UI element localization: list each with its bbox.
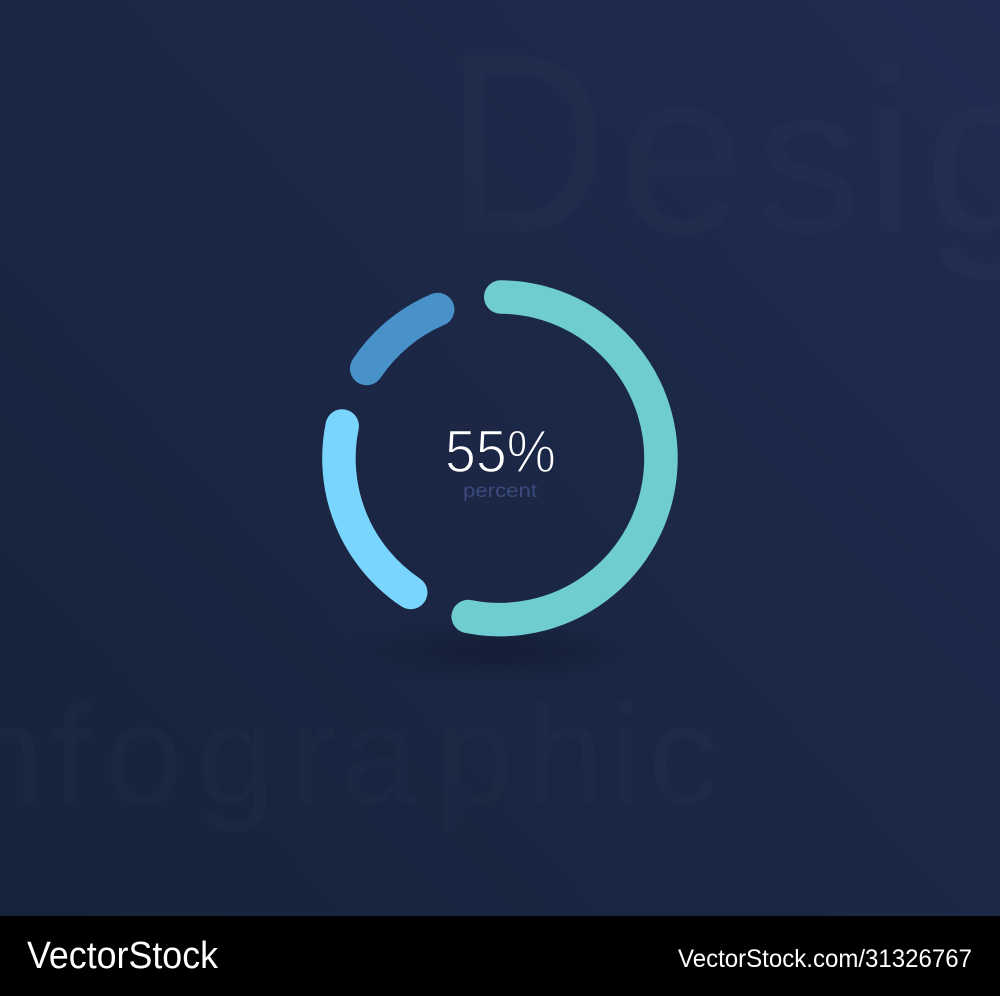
segment: light blue — [339, 426, 411, 592]
ghost word: Infographic: g — [197, 676, 275, 833]
donut drop shadow — [330, 616, 670, 688]
ghost word: Infographic: c — [648, 676, 718, 833]
ghost word: Infographic: f — [52, 676, 92, 833]
ghost word: Design: D — [445, 1, 608, 287]
footer brand: VectorStock: VectorStock — [27, 935, 219, 977]
segment: mid blue — [367, 310, 438, 368]
footer id: VectorStock.com/31326767: VectorStock.com/31326767 — [678, 945, 972, 973]
center value: 55%: 55% — [445, 418, 556, 485]
segment: 55% teal — [468, 297, 661, 620]
ghost word: Infographic: o — [105, 676, 183, 833]
ghost word: Infographic: p — [436, 676, 514, 833]
ghost word: Infographic: a — [341, 676, 419, 833]
ghost word: Design: i — [864, 23, 916, 282]
ghost word: Design — [445, 1, 1000, 287]
footer bar — [0, 916, 1000, 996]
ghost word: Infographic: r — [290, 676, 337, 833]
ghost word: Infographic — [0, 676, 718, 833]
ghost word: Infographic: i — [610, 676, 641, 833]
ghost word: Design: e — [617, 23, 746, 282]
ghost word: Infographic: h — [526, 676, 604, 833]
center label: percent: percent — [463, 481, 538, 502]
donut chart — [339, 297, 661, 620]
ghost word: Design: s — [756, 42, 861, 277]
